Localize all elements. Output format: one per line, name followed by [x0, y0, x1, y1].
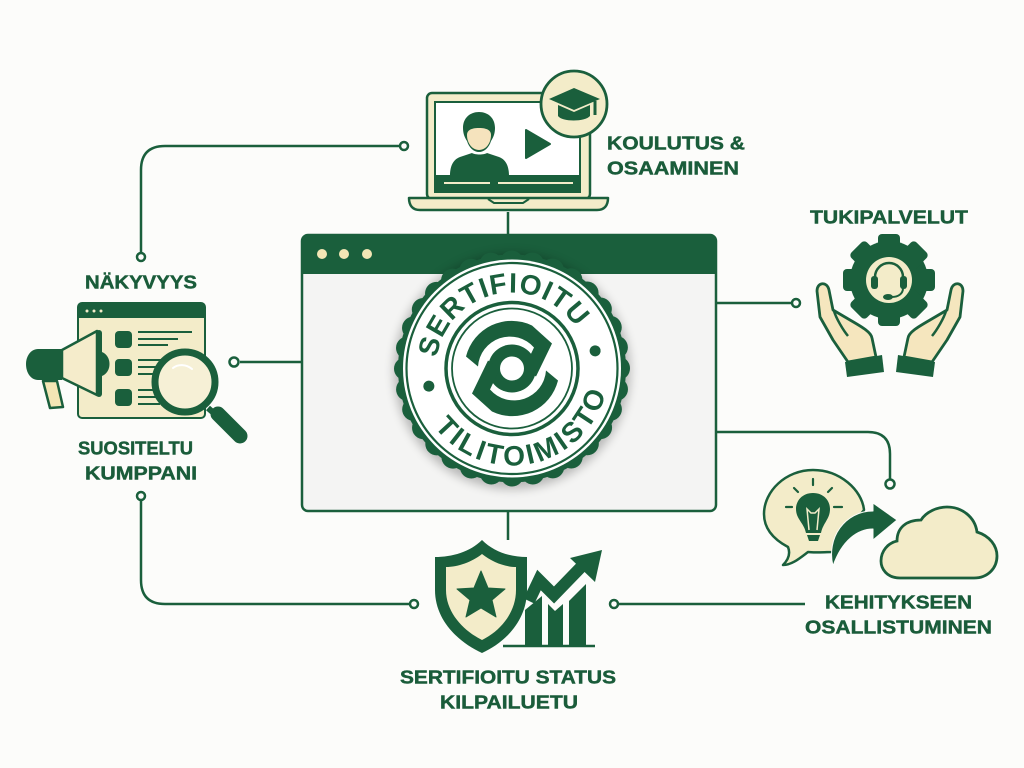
label: tukipalvelut: TUKIPALVELUT	[810, 206, 969, 228]
label: sertifioitu status kilpailuetu: SERTIFIOITU STATUS	[400, 666, 616, 688]
label: kehitykseen osallistuminen: KEHITYKSEEN	[825, 592, 972, 612]
icon: speech bubble with lightbulb	[764, 470, 897, 566]
label: koulutus: OSAAMINEN	[607, 158, 739, 178]
icon: listing window with megaphone and magnifier	[26, 303, 240, 436]
arrow	[832, 503, 897, 566]
label: näkyvyys: NÄKYVYYS	[85, 272, 197, 292]
label: koulutus: KOULUTUS &	[607, 132, 745, 154]
label: suositeltu kumppani	[78, 438, 197, 484]
icon: megaphone	[26, 330, 110, 408]
label: suositeltu kumppani: KUMPPANI	[85, 462, 197, 484]
seal text: SERTIFIOITU	[419, 273, 590, 356]
icon: shield with star	[435, 540, 527, 653]
certified seal badge	[389, 250, 635, 494]
label: koulutus	[607, 132, 745, 178]
panel: central browser window	[302, 235, 716, 511]
connector lines	[137, 142, 894, 608]
label: sertifioitu status kilpailuetu	[400, 666, 616, 712]
icon: laptop with video and graduation cap	[409, 71, 608, 210]
label: sertifioitu status kilpailuetu: KILPAILUETU	[440, 692, 578, 712]
label: suositeltu kumppani: SUOSITELTU	[78, 438, 193, 458]
label: kehitykseen osallistuminen	[805, 592, 992, 638]
icon: graduation cap badge	[541, 71, 607, 137]
icon: gear with headset and hands	[817, 234, 963, 377]
icon: left hand	[817, 284, 884, 377]
icon: growth chart	[503, 550, 602, 646]
icon: magnifier	[155, 352, 240, 436]
seal logo mark	[466, 321, 558, 416]
icon: cloud	[881, 507, 997, 578]
seal text: TILITOIMISTO	[438, 390, 604, 466]
seal text	[419, 273, 604, 466]
icon: right hand	[896, 284, 963, 377]
label: kehitykseen osallistuminen: OSALLISTUMINEN	[805, 616, 992, 638]
